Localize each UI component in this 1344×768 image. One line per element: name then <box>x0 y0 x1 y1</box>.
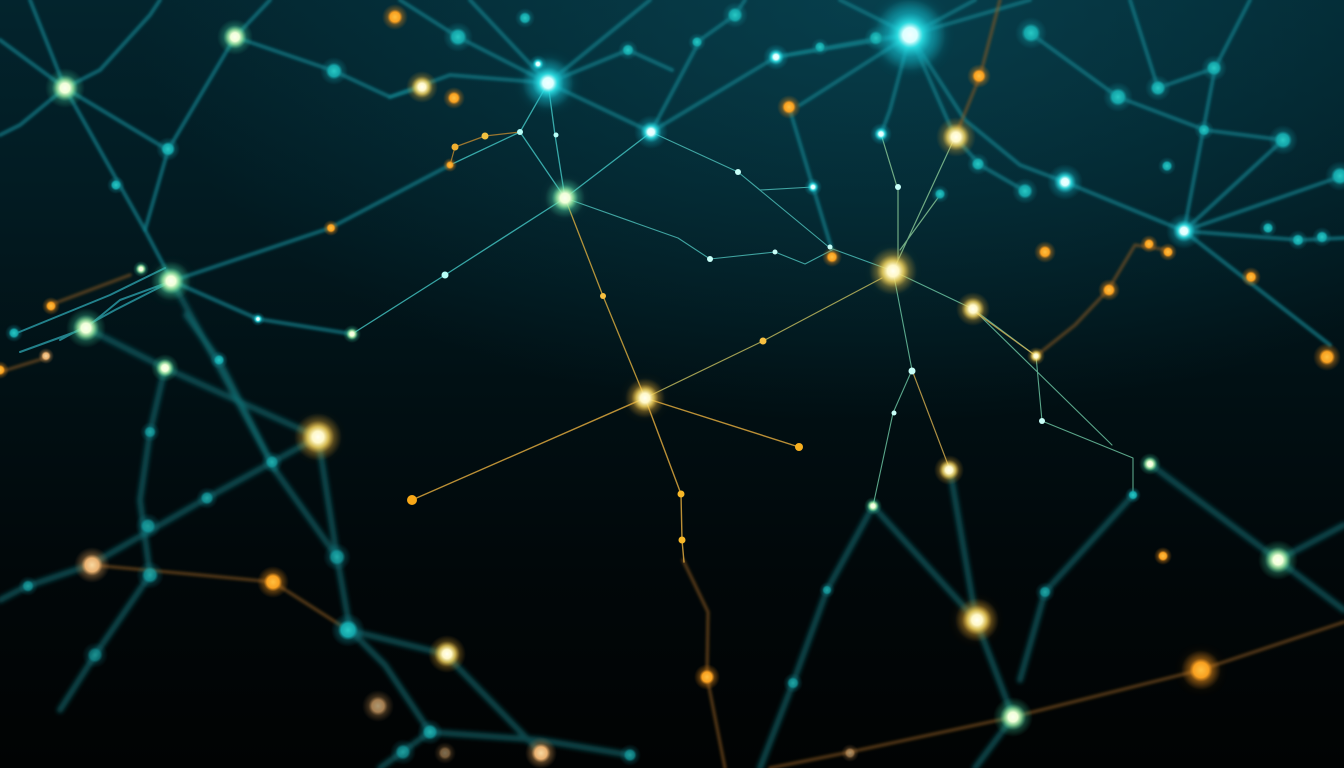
soft peach nodes <box>74 547 557 768</box>
soft halos around main hubs <box>160 5 1213 682</box>
teal connections, upper network <box>0 0 1344 345</box>
teal connections, blurred foreground <box>0 281 1344 768</box>
glowing teal nodes <box>522 0 1298 249</box>
thin bright foreground connections <box>12 83 1133 562</box>
bright yellow hub nodes <box>294 117 1045 642</box>
small crisp junction dots <box>407 129 1045 544</box>
